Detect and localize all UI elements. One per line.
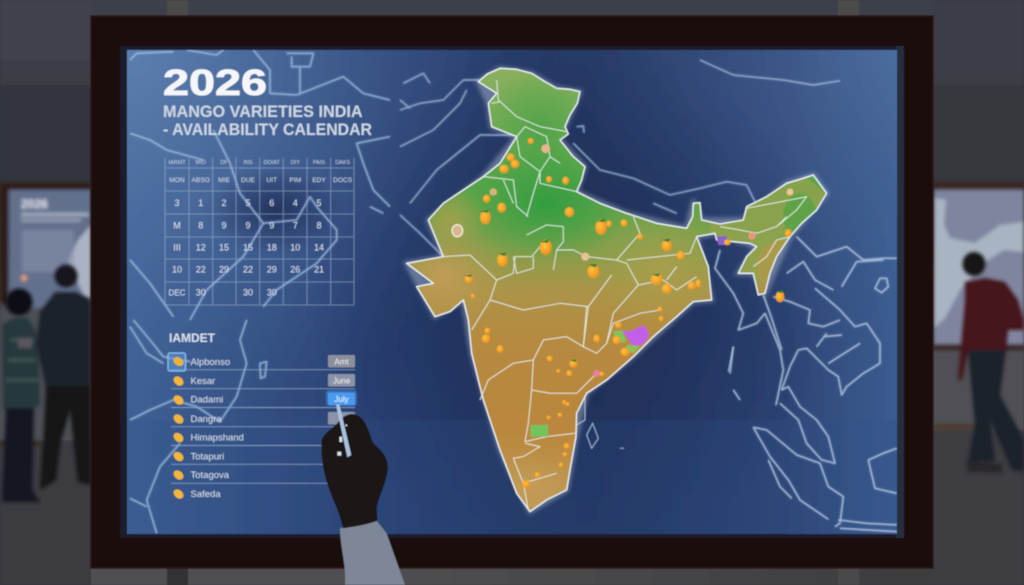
- neighbouring map lines: south-west coast: [130, 320, 267, 533]
- mango icons: [172, 356, 184, 500]
- calendar dates: 4: [293, 198, 298, 208]
- variety names: Totagova: [190, 470, 230, 481]
- badge fragments seen through fingers: [337, 424, 347, 456]
- variety names: Kesar: [190, 376, 215, 387]
- calendar dates: 5: [316, 198, 322, 208]
- display screen: [127, 40, 897, 560]
- variety names: Dangra: [190, 414, 222, 425]
- month badges: June: [333, 376, 351, 386]
- month badges: [326, 355, 357, 424]
- calendar header labels: DF: [220, 160, 228, 166]
- month badges: Amt: [334, 358, 349, 366]
- calendar dates: 30: [196, 288, 206, 298]
- calendar dates: III: [173, 242, 181, 252]
- calendar weekday labels: ABSO: [192, 177, 210, 184]
- list heading: IAMDET: [169, 331, 216, 345]
- variety names: Dadami: [190, 394, 223, 406]
- calendar dates: 10: [290, 242, 300, 252]
- person: man in red sweater: [958, 252, 1024, 473]
- hand silhouette: [321, 414, 388, 528]
- calendar dates: 14: [314, 242, 324, 252]
- title: main heading: MANGO VARIETIES INDIA: [163, 103, 363, 121]
- variety list: [168, 331, 357, 501]
- map: mango markers: [465, 138, 792, 488]
- title: [162, 68, 372, 136]
- stylus: [336, 404, 351, 457]
- calendar weekday labels: PIM: [289, 177, 301, 184]
- variety names: Safeda: [190, 489, 221, 500]
- calendar header labels: DOIAT: [263, 160, 281, 166]
- calendar weekday labels: MIE: [218, 177, 230, 184]
- calendar dates: 10: [172, 264, 182, 274]
- left background display: 2026: [21, 197, 48, 211]
- calendar dates: 15: [219, 242, 229, 252]
- selected variety icon tile: [168, 353, 186, 371]
- shirt sleeve: [340, 521, 405, 585]
- calendar dates: 6: [269, 198, 274, 208]
- calendar dates: 8: [316, 220, 322, 230]
- calendar dates: 18: [267, 242, 277, 252]
- map: state borders: [443, 80, 807, 510]
- calendar weekday labels: MON: [169, 177, 185, 184]
- calendar dates: 26: [290, 264, 300, 274]
- calendar weekday labels: DUE: [241, 177, 256, 184]
- variety names: Alpbonso: [190, 357, 230, 368]
- map: India choropleth: [405, 66, 828, 513]
- calendar header labels: [168, 160, 351, 166]
- variety names: Totapuri: [190, 452, 224, 462]
- map: India glow: [407, 68, 827, 512]
- hand with stylus: [321, 404, 405, 585]
- calendar dates: 9: [245, 220, 251, 230]
- title: main heading: - AVAILABILITY CALENDAR: [163, 121, 372, 139]
- person: child silhouette: [2, 288, 40, 502]
- list dividers: [171, 370, 355, 483]
- variety names: Himapshand: [190, 432, 244, 444]
- calendar dates: 30: [243, 288, 253, 298]
- calendar header labels: PAIS: [313, 160, 325, 166]
- calendar dates: 15: [243, 242, 253, 252]
- calendar dates: 22: [243, 264, 253, 274]
- calendar dates: M: [173, 220, 181, 230]
- neighbouring map lines: north and west of India: [400, 60, 840, 257]
- calendar dates: 8: [198, 220, 203, 230]
- calendar dates: DEC: [169, 288, 186, 298]
- calendar header labels: INS: [243, 160, 253, 166]
- calendar dates: 29: [267, 264, 277, 274]
- calendar header labels: DIY: [291, 160, 300, 166]
- calendar dates: 9: [221, 220, 227, 230]
- calendar header labels: DAKS: [335, 160, 351, 166]
- left background display: [0, 183, 91, 446]
- map: mango leaves: [465, 210, 783, 362]
- calendar dates: 30: [267, 288, 277, 298]
- neighbouring map lines: south-east Asia: [715, 237, 897, 532]
- calendar dates: 29: [219, 264, 229, 274]
- calendar dates: 21: [314, 264, 324, 274]
- calendar dates: 9: [269, 220, 274, 230]
- person: adult silhouette: [36, 264, 91, 490]
- variety names: [190, 357, 244, 500]
- calendar weekday labels: UIT: [266, 177, 277, 184]
- map: Sri Lanka and islands: [576, 347, 733, 448]
- calendar weekday labels: DOCS: [333, 177, 353, 184]
- calendar weekday labels: EDY: [312, 177, 326, 184]
- calendar dates: 22: [196, 264, 206, 274]
- calendar dates: 2: [221, 198, 227, 208]
- calendar dates: 1: [198, 198, 203, 208]
- calendar dates: 7: [293, 220, 298, 230]
- calendar header labels: MIO: [196, 160, 207, 166]
- calendar grid: [165, 158, 354, 305]
- calendar dates: 3: [174, 198, 180, 208]
- month badges: July: [334, 395, 349, 404]
- calendar weekday labels: [169, 177, 353, 184]
- calendar dates: 5: [245, 198, 251, 208]
- calendar dates: 12: [196, 242, 206, 252]
- map: highlighted districts: [452, 144, 793, 437]
- wooden frame: [91, 16, 933, 568]
- title: year: 2026: [163, 62, 267, 103]
- calendar header labels: IARMT: [168, 160, 186, 166]
- availability calendar: [165, 158, 354, 305]
- right background display: [933, 182, 1024, 430]
- calendar dates: [169, 198, 324, 298]
- neighbouring map lines: west: [130, 50, 390, 320]
